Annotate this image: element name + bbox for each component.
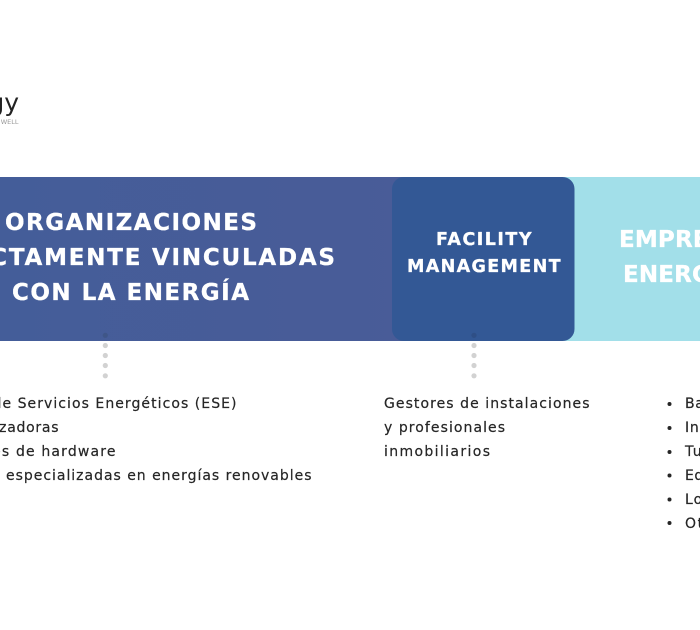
heading: organizaciones xyxy=(0,210,335,306)
panel: organizaciones directamente vinculadas xyxy=(0,177,410,341)
heading: empresas xyxy=(619,227,700,288)
heading: facility management: FACILITY xyxy=(436,230,532,250)
heading: organizaciones: CON LA ENERGÍA xyxy=(12,278,249,306)
connector dots: organizaciones xyxy=(103,333,108,378)
text block: empresas list xyxy=(668,396,700,532)
text block: organizaciones list: especializadas en energías renovables xyxy=(6,468,312,484)
text block: facility description: inmobiliarios xyxy=(384,444,490,460)
heading: facility management xyxy=(407,230,561,277)
text block: facility description: y profesionales xyxy=(384,420,505,436)
text block: facility description: Gestores de instalaciones xyxy=(384,396,590,412)
text block: organizaciones list xyxy=(0,396,312,484)
heading: facility management: MANAGEMENT xyxy=(407,257,561,277)
heading: organizaciones: ORGANIZACIONES xyxy=(5,210,257,236)
panel: facility management xyxy=(392,177,574,341)
panel: empresas energéticas xyxy=(550,177,700,341)
text block: facility description xyxy=(384,396,590,460)
connector dots: facility xyxy=(471,333,477,378)
